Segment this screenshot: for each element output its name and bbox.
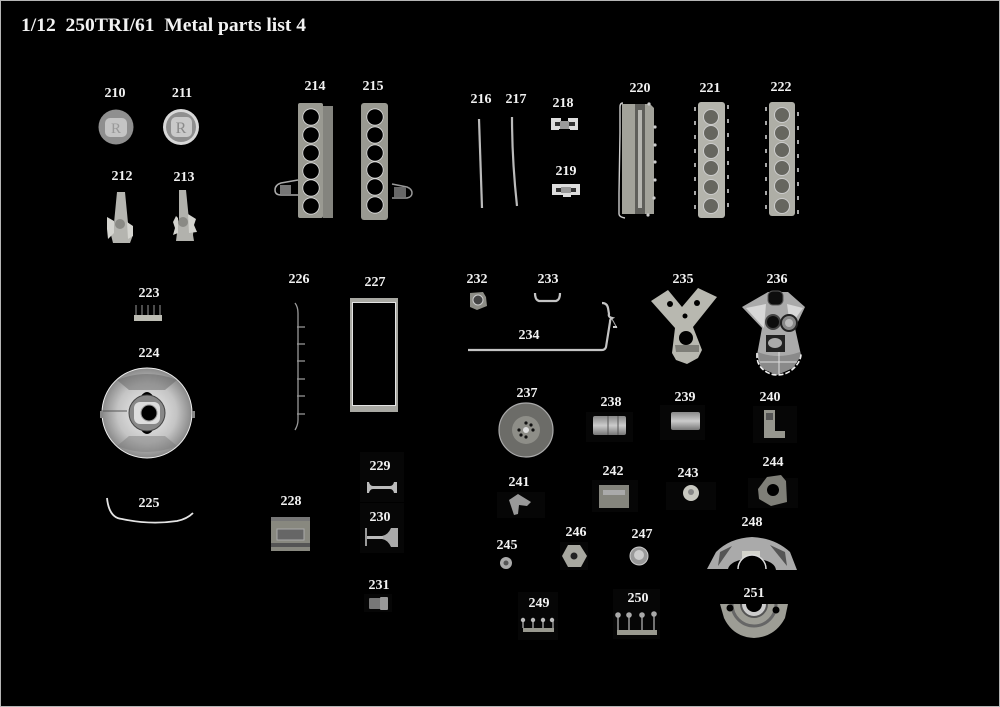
part 238 bbox=[586, 395, 633, 442]
part 245 bbox=[496, 538, 518, 569]
part 211 bbox=[163, 86, 199, 145]
part 220: 220 bbox=[630, 81, 650, 96]
part 224 bbox=[100, 346, 195, 458]
part 242: 242 bbox=[602, 464, 624, 479]
part 243 bbox=[666, 466, 716, 510]
part 235: 235 bbox=[672, 272, 694, 287]
part 239 bbox=[660, 390, 705, 440]
part 217: 217 bbox=[506, 92, 526, 107]
part 214: 214 bbox=[304, 79, 326, 94]
part 238: 238 bbox=[600, 395, 622, 410]
part 229: 229 bbox=[370, 459, 390, 474]
part 219: 219 bbox=[556, 164, 576, 179]
part 211: R bbox=[176, 120, 187, 137]
part 247: 247 bbox=[632, 527, 652, 542]
part 233 bbox=[535, 272, 560, 301]
part 218: 218 bbox=[552, 96, 574, 111]
part 231 bbox=[364, 578, 392, 612]
part 245: 245 bbox=[496, 538, 518, 553]
part 221 bbox=[695, 81, 728, 218]
part 227 bbox=[350, 275, 398, 412]
part 244 bbox=[748, 455, 798, 508]
part 243: 243 bbox=[678, 466, 698, 481]
part 229 bbox=[360, 452, 404, 502]
part 215: 215 bbox=[362, 79, 384, 94]
part 231: 231 bbox=[368, 578, 390, 593]
part 248 bbox=[707, 515, 797, 570]
part 222 bbox=[766, 80, 798, 216]
part 240 bbox=[753, 390, 797, 443]
part 234: 234 bbox=[518, 328, 540, 343]
part 237 bbox=[499, 386, 553, 457]
part 218 bbox=[551, 96, 578, 130]
part 223 bbox=[134, 286, 162, 321]
part 234 bbox=[468, 303, 617, 350]
part 213 bbox=[173, 170, 197, 241]
part 210: R bbox=[111, 121, 121, 137]
part 210 bbox=[98, 86, 134, 144]
part 233: 233 bbox=[538, 272, 558, 287]
part 236: 236 bbox=[766, 272, 788, 287]
part 221: 221 bbox=[700, 81, 720, 96]
part 239: 239 bbox=[674, 390, 696, 405]
part 251 bbox=[720, 586, 788, 638]
part 247 bbox=[630, 527, 652, 565]
title: 1/12 250TRI/61 Metal parts list 4 bbox=[21, 15, 307, 36]
part 248: 248 bbox=[742, 515, 762, 530]
part 223: 223 bbox=[138, 286, 160, 301]
part 240: 240 bbox=[760, 390, 780, 405]
part 235 bbox=[651, 272, 717, 364]
part 215 bbox=[361, 79, 412, 220]
part 249 bbox=[518, 592, 558, 640]
part 246 bbox=[560, 525, 588, 570]
part 212: 212 bbox=[112, 169, 132, 184]
part 241 bbox=[497, 475, 545, 518]
part 230: 230 bbox=[370, 510, 390, 525]
part 225: 225 bbox=[138, 496, 160, 511]
part 241: 241 bbox=[508, 475, 530, 490]
part 249: 249 bbox=[528, 596, 550, 611]
part 226 bbox=[288, 272, 310, 430]
part 216: 216 bbox=[470, 92, 492, 107]
part 226: 226 bbox=[288, 272, 310, 287]
part 236 bbox=[742, 272, 805, 375]
part 228: 228 bbox=[280, 494, 302, 509]
part 225 bbox=[107, 496, 193, 523]
part 210: 210 bbox=[104, 86, 126, 101]
part 244: 244 bbox=[762, 455, 784, 470]
part 251: 251 bbox=[744, 586, 764, 601]
part 228 bbox=[271, 494, 310, 551]
part 250: 250 bbox=[628, 591, 648, 606]
part 227: 227 bbox=[364, 275, 386, 290]
part 242 bbox=[592, 464, 638, 512]
part 216 bbox=[470, 92, 492, 208]
part 232: 232 bbox=[466, 272, 488, 287]
part 246: 246 bbox=[566, 525, 586, 540]
part 213: 213 bbox=[174, 170, 194, 185]
part 230 bbox=[360, 503, 404, 553]
part 222: 222 bbox=[770, 80, 792, 95]
part 214 bbox=[275, 79, 333, 218]
part 232 bbox=[466, 272, 488, 310]
part 250 bbox=[613, 589, 660, 639]
part 219 bbox=[552, 164, 580, 197]
part 237: 237 bbox=[516, 386, 538, 401]
part 220 bbox=[619, 81, 657, 218]
part 212 bbox=[107, 169, 133, 243]
part 217 bbox=[506, 92, 526, 206]
part 211: 211 bbox=[172, 86, 192, 101]
part 224: 224 bbox=[138, 346, 160, 361]
